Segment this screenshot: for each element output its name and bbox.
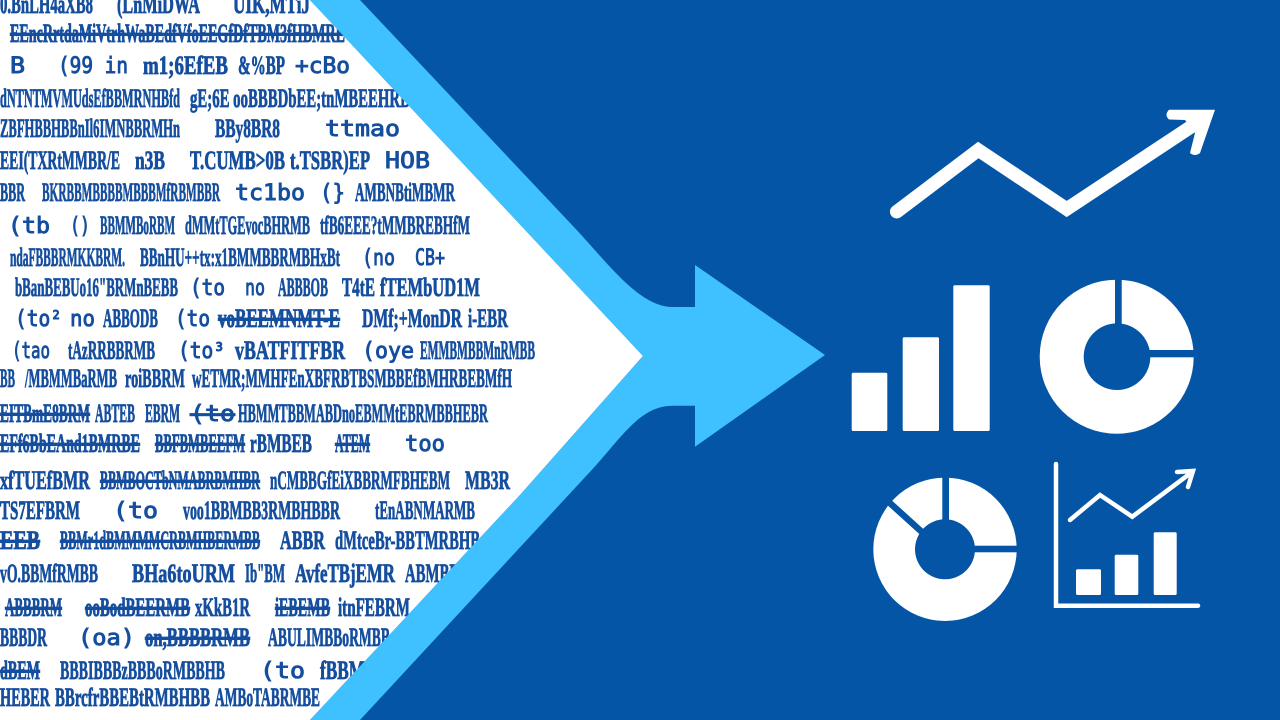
panel: garbled document text: AMBoTABRMBE — [215, 683, 320, 712]
panel: garbled document text: (} — [320, 181, 345, 206]
panel: garbled document text: (to — [190, 276, 225, 301]
panel: garbled document text: AMBNBtiMBMR — [355, 178, 455, 207]
panel: garbled document text: CB+ — [415, 246, 445, 271]
panel: garbled document text: (99 in — [58, 54, 128, 79]
panel: garbled document text: xfTUEfBMR — [0, 466, 90, 495]
panel: garbled document text: ZBFHBBHBBnIl6IMNBBRMHn — [0, 114, 180, 143]
panel: garbled document text: ABBODB — [103, 304, 158, 333]
panel: garbled document text: (tao — [12, 339, 50, 364]
panel: garbled document text: ABBBRM — [5, 593, 62, 622]
panel: garbled document text: tc1bo — [235, 181, 305, 206]
panel: garbled document text: on,BBBBRMB — [145, 623, 250, 652]
panel: garbled document text: too — [405, 432, 445, 457]
panel: garbled document text: tfB6EEE?tMMBREBHfM — [320, 211, 470, 240]
panel: garbled document text: itnFEBRM — [338, 593, 410, 622]
icon: rising trend line arrow — [897, 110, 1215, 212]
panel: garbled document text: wETMR;MMHFEnXBFRBTBSMBBEfBMHRBEBMfH — [192, 364, 512, 393]
panel: garbled document text: no — [245, 276, 265, 301]
panel: garbled document text: T4tE — [342, 273, 375, 302]
panel: garbled document text: HBMMTBBMABDnoEBMMtEBRMBBHEBR — [238, 399, 488, 428]
panel: garbled document text: no — [70, 307, 95, 332]
panel: garbled document text: (to³ — [178, 339, 225, 364]
panel: garbled document text: iEBEMB — [275, 593, 330, 622]
panel: garbled document text: gE;6E ooBBBDbEE;tnMBEEHRB — [190, 84, 410, 113]
panel: garbled document text: BBnHU++tx:x1BMMBBRMBHxBt — [140, 243, 340, 272]
panel: garbled document text: BBy8BR8 — [215, 114, 280, 143]
panel: garbled document text: (oa) — [78, 626, 135, 651]
panel: garbled document text: tAzRRBBRMB — [68, 336, 155, 365]
panel: garbled document text: T.CUMB>0B — [190, 146, 285, 175]
panel: garbled document text: vO.BBMfRMBB — [0, 559, 98, 588]
panel: garbled document text: HEBER — [0, 683, 50, 712]
panel: garbled document text: bBanBEBUo16"BRMnBEBB — [15, 273, 178, 302]
panel: garbled document text: dBEM — [0, 656, 40, 685]
panel: garbled document text: BBBIBBBzBBBoRMBBHB — [60, 656, 225, 685]
panel: garbled document text: EMMBMBBMnRMBB — [420, 336, 535, 365]
panel: garbled document text: BBFBMBEEFM — [155, 429, 245, 458]
panel: garbled document text: BBR — [0, 178, 25, 207]
panel: garbled document text: (oye — [362, 339, 414, 364]
panel: garbled document text: HOB — [385, 149, 430, 174]
panel: garbled document text: (to — [260, 659, 305, 684]
panel: garbled document text: fBBM — [320, 656, 365, 685]
panel: garbled document text — [0, 0, 660, 720]
panel: garbled document text: BBMBOCTbNMABRBMHBR — [100, 466, 260, 495]
panel: garbled document text: EITBmE8BRM — [0, 399, 90, 428]
panel: garbled document text: MB3R — [465, 466, 510, 495]
panel: garbled document text: EEncRrtdaMiVtrhWaBEdfVfoEEGfDfTBM3fHBMRE — [10, 19, 345, 48]
panel: garbled document text: voBEEMNMT-E — [218, 304, 340, 333]
icon: combined bar and line chart with axes — [1056, 464, 1198, 606]
panel: garbled document text: BBrcfrBBEBtRMBHBB — [55, 683, 210, 712]
panel: garbled document text: (to — [113, 499, 158, 524]
panel: garbled document text: fTEMbUD1M — [380, 273, 480, 302]
panel: garbled document text: (tb — [8, 214, 50, 239]
panel: garbled document text: /MBMMBaRMB — [25, 364, 117, 393]
panel: garbled document text: (to² — [15, 307, 62, 332]
panel: garbled document text: ttmao — [325, 117, 400, 142]
panel: garbled document text: dMtceBr-BBTMRBHB — [335, 526, 480, 555]
panel: garbled document text: t.TSBR)EP — [290, 146, 370, 175]
panel: garbled document text: ooBodBEERMB — [85, 593, 190, 622]
icon: donut chart with three gaps — [873, 474, 1020, 621]
panel: garbled document text: BBMr1dBMMMMCRBMHBERMBB — [60, 526, 260, 555]
panel: garbled document text: ABTEB — [95, 399, 135, 428]
panel: garbled document text: BHa6toURM — [132, 559, 235, 588]
panel: garbled document text: B — [10, 54, 25, 79]
panel: garbled document text: i-EBR — [468, 304, 508, 333]
panel: garbled document text: ABMBR — [405, 559, 460, 588]
panel: garbled document text: BBBDR — [0, 623, 47, 652]
panel: garbled document text: EBRM — [145, 399, 180, 428]
panel: garbled document text: (to — [190, 402, 235, 427]
panel: garbled document text: BKRBBMBBBBMBBBMfRBMBBR — [42, 178, 220, 207]
panel: garbled document text: tEnABNMARMB — [375, 496, 475, 525]
panel: garbled document text: (to — [175, 307, 210, 332]
panel: garbled document text: EEI(TXRtMMBR/E — [0, 146, 120, 175]
panel: garbled document text: () — [70, 214, 90, 239]
panel: garbled document text: EEB — [0, 526, 40, 555]
panel: garbled document text: BB — [0, 364, 15, 393]
panel: garbled document text: EFf6BbEAnd1BMRBE — [0, 429, 140, 458]
panel: garbled document text: nCMBBGfEiXBBRMFBHEBM — [270, 466, 450, 495]
panel: garbled document text: ABBR — [280, 526, 325, 555]
panel: garbled document text: &%BP — [238, 51, 285, 80]
panel: garbled document text: ABULIMBBoRMBB — [268, 623, 390, 652]
panel: garbled document text: ndaFBBBRMKKBRM. — [10, 243, 125, 272]
icon: bar chart — [852, 285, 990, 431]
arrow: light blue chevron converging into arrowhead — [310, 0, 825, 720]
panel: garbled document text: (no — [362, 246, 395, 271]
panel: garbled document text: dNTNTMVMUdsEfBBMRNHBfd — [0, 84, 180, 113]
panel: garbled document text: AvfeTBjEMR — [295, 559, 395, 588]
panel: garbled document text: ATEM — [335, 429, 370, 458]
panel: garbled document text: +cBo — [295, 54, 350, 79]
panel: garbled document text: vBATFITFBR — [235, 336, 345, 365]
panel: garbled document text: n3B — [135, 146, 165, 175]
panel: garbled document text: roiBBRM — [125, 364, 185, 393]
panel: garbled document text: TS7EFBRM — [0, 496, 80, 525]
panel: garbled document text: BBMMBoRBM — [100, 211, 175, 240]
panel: garbled document text: dMMtTGEvocBHRMB — [185, 211, 310, 240]
icon: donut chart with two gaps — [1040, 275, 1198, 434]
panel: garbled document text: m1;6EfEB — [143, 51, 228, 80]
panel: garbled document text: rBMBEB — [250, 429, 312, 458]
panel: garbled document text: ABBBOB — [278, 273, 328, 302]
panel: garbled document text: voo1BBMBB3RMBHBBR — [183, 496, 340, 525]
panel: garbled document text: Ib"BM — [245, 559, 285, 588]
panel: garbled document text: DMf;+MonDR — [362, 304, 462, 333]
panel: garbled document text: xKkB1R — [195, 593, 250, 622]
